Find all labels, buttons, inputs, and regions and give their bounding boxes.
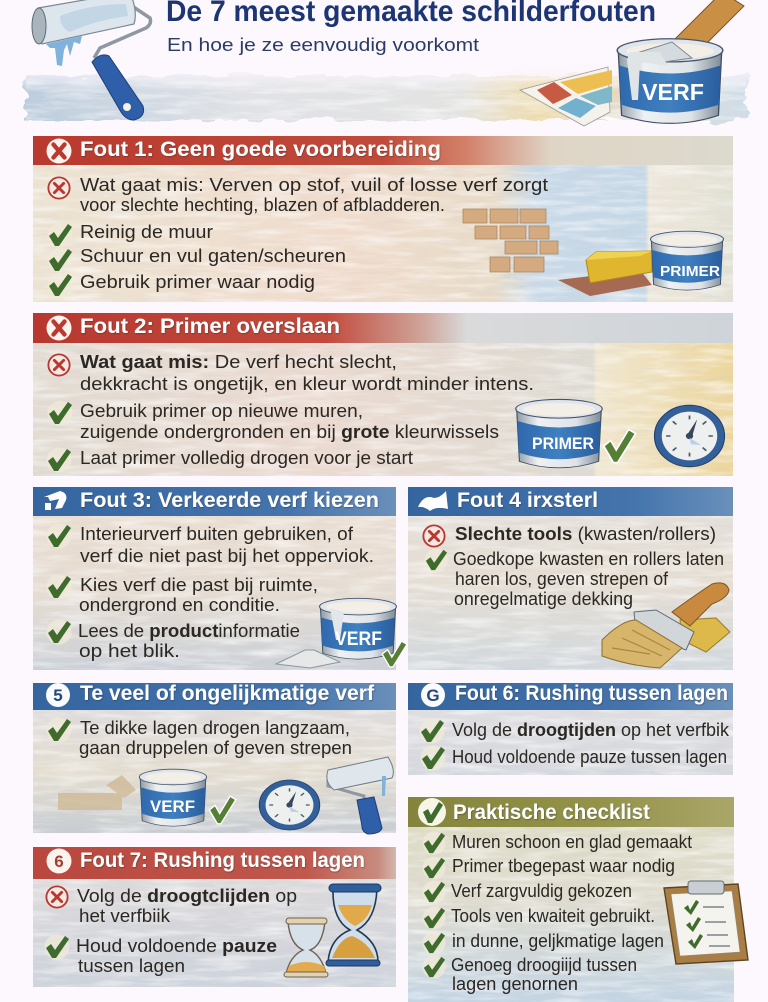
header bar <box>408 683 733 710</box>
checklist: verf kiezen: Kies verf die past bij ruimte, <box>80 574 318 595</box>
checklist: primer: zuigende ondergronden en bij grote kleurwissels <box>80 421 499 442</box>
icon: paint roller <box>32 0 150 120</box>
icon: primer can <box>651 231 723 290</box>
icon: check badge <box>418 798 446 826</box>
label: PRIMER: PRIMER <box>532 434 594 453</box>
icon: error <box>46 138 72 164</box>
checklist items: Primer tbegepast waar nodig <box>452 855 675 876</box>
checklist: voorbereiding: Gebruik primer waar nodig <box>80 271 315 292</box>
checklist: verf kiezen: ondergrond en conditie. <box>79 594 280 615</box>
header bar <box>408 797 734 827</box>
text: pauze <box>44 934 277 976</box>
text: wat gaat mis <box>48 174 548 215</box>
checklist: verf kiezen: verf die niet past bij het opperviok. <box>80 545 374 566</box>
heading: Praktische checklist <box>453 800 650 824</box>
text: wat gaat mis: Wat gaat mis: De verf hecht slecht, <box>80 351 397 372</box>
text: slechte tools: Slechte tools (kwasten/rollers) <box>455 523 716 544</box>
panel: fout 3 <box>33 487 407 670</box>
watercolor band <box>15 66 755 120</box>
icon: error <box>46 316 72 340</box>
icon: stones <box>58 775 136 810</box>
text: droogtijden: het verfbiik <box>79 905 171 926</box>
icon: small hourglass <box>284 918 328 977</box>
icon: paint can <box>139 769 207 826</box>
icon: primer can <box>516 399 602 468</box>
icon: sponge <box>558 251 652 296</box>
icon: brick wall <box>463 209 558 272</box>
checklist: te dikke lagen <box>46 717 352 758</box>
panel: fout 6 <box>408 681 733 775</box>
checklist: droogtijden: Volg de droogtijden op het verfbik <box>452 719 730 740</box>
checklist: droogtijden: Houd voldoende pauze tussen lagen <box>452 746 727 767</box>
text: goedkope kwasten <box>424 548 724 609</box>
text: wat gaat mis: Wat gaat mis: Verven op stof, vuil of losse verf zorgt <box>80 174 548 195</box>
icon: number badge <box>46 848 72 874</box>
panel: fout 4 <box>408 487 733 670</box>
checklist: primer: Gebruik primer op nieuwe muren, <box>80 400 363 421</box>
panel: fout 5 <box>33 681 396 834</box>
panel: fout 2 <box>33 313 733 476</box>
text: goedkope kwasten: Goedkope kwasten en rollers laten <box>453 548 724 569</box>
icon: paint roller <box>327 757 393 834</box>
icon: number badge <box>46 683 70 707</box>
icon: clock <box>259 780 320 830</box>
header bar <box>33 136 733 165</box>
text: wat gaat mis: voor slechte hechting, blazen of afbladderen. <box>80 194 445 215</box>
header bar <box>33 847 396 879</box>
text: wat gaat mis <box>48 351 534 394</box>
icon: check <box>382 641 407 667</box>
label: PRIMER: PRIMER <box>660 264 721 280</box>
checklist: verf kiezen <box>46 523 374 661</box>
checklist: primer <box>46 400 499 472</box>
icon: clock <box>654 405 725 467</box>
header bar <box>33 487 396 516</box>
checklist items: in dunne, geljkmatige lagen <box>452 930 664 951</box>
panel: praktische checklist <box>408 797 748 1002</box>
checklist: verf kiezen: op het blik. <box>79 640 180 661</box>
icon: number badge: G <box>426 686 440 705</box>
icon: clipboard <box>664 881 748 964</box>
icon: paint brush <box>602 583 730 668</box>
text: pauze: Houd voldoende pauze <box>76 935 277 956</box>
label: VERF: VERF <box>642 79 704 105</box>
icon: number badge: 5 <box>53 686 63 705</box>
checklist: voorbereiding <box>48 221 346 298</box>
header bar <box>33 313 733 343</box>
heading: Fout 7: Rushing tussen lagen <box>80 848 365 872</box>
checklist: voorbereiding: Reinig de muur <box>80 221 213 242</box>
checklist: primer: Laat primer volledig drogen voor je start <box>80 447 413 468</box>
checklist items: Muren schoon en glad gemaakt <box>452 831 692 852</box>
checklist items <box>422 831 692 994</box>
heading: Fout 4 irxsterl <box>457 488 598 512</box>
text: goedkope kwasten: haren los, geven strepen of <box>455 568 669 589</box>
heading: Fout 3: Verkeerde verf kiezen <box>80 488 379 512</box>
icon: paint brush in can <box>617 0 744 123</box>
checklist: verf kiezen: Interieurverf buiten gebruiken, of <box>80 523 354 544</box>
header bar <box>33 683 396 710</box>
header bar <box>408 487 733 516</box>
panel: fout 7 <box>33 847 396 987</box>
icon: large hourglass <box>326 884 381 966</box>
icon: check <box>209 796 236 824</box>
checklist: te dikke lagen: Te dikke lagen drogen langzaam, <box>80 717 350 738</box>
icon: paper scraps <box>276 650 340 668</box>
icon: check <box>604 429 636 463</box>
text: goedkope kwasten: onregelmatige dekking <box>454 588 633 609</box>
checklist items: lagen genornen <box>452 973 578 994</box>
icon: roller mark <box>44 491 66 510</box>
panel: fout 1 <box>33 136 733 302</box>
label: VERF: VERF <box>335 629 382 650</box>
heading: Fout 6: Rushing tussen lagen <box>455 681 728 705</box>
text: droogtijden <box>46 885 297 926</box>
checklist: te dikke lagen: gaan druppelen of geven strepen <box>79 737 352 758</box>
checklist: voorbereiding: Schuur en vul gaten/scheuren <box>80 245 346 266</box>
icon: paint can <box>320 598 396 659</box>
icon: number badge: 6 <box>54 852 64 871</box>
text: pauze: tussen lagen <box>78 955 185 976</box>
heading: Te veel of ongelijkmatige verf <box>80 681 375 705</box>
header banner <box>15 0 755 126</box>
text: wat gaat mis: dekkracht is ongetijk, en kleur wordt minder intens. <box>80 373 534 394</box>
subtitle: En hoe je ze eenvoudig voorkomt <box>167 34 479 55</box>
icon: number badge <box>421 683 445 707</box>
text: droogtijden: Volg de droogtclijden op <box>77 885 297 906</box>
heading: Fout 1: Geen goede voorbereiding <box>80 137 441 161</box>
checklist items: Tools ven kwaiteit gebruikt. <box>451 905 655 926</box>
label: VERF: VERF <box>150 797 195 816</box>
heading: Fout 2: Primer overslaan <box>80 314 340 338</box>
icon: splash <box>418 491 448 511</box>
checklist: droogtijden <box>420 718 730 770</box>
checklist: verf kiezen: Lees de productinformatie <box>78 620 300 641</box>
icon: colour swatch <box>520 67 612 126</box>
checklist items: Genoeg droogiijd tussen <box>451 954 637 975</box>
checklist items: Verf zargvuldig gekozen <box>451 880 632 901</box>
